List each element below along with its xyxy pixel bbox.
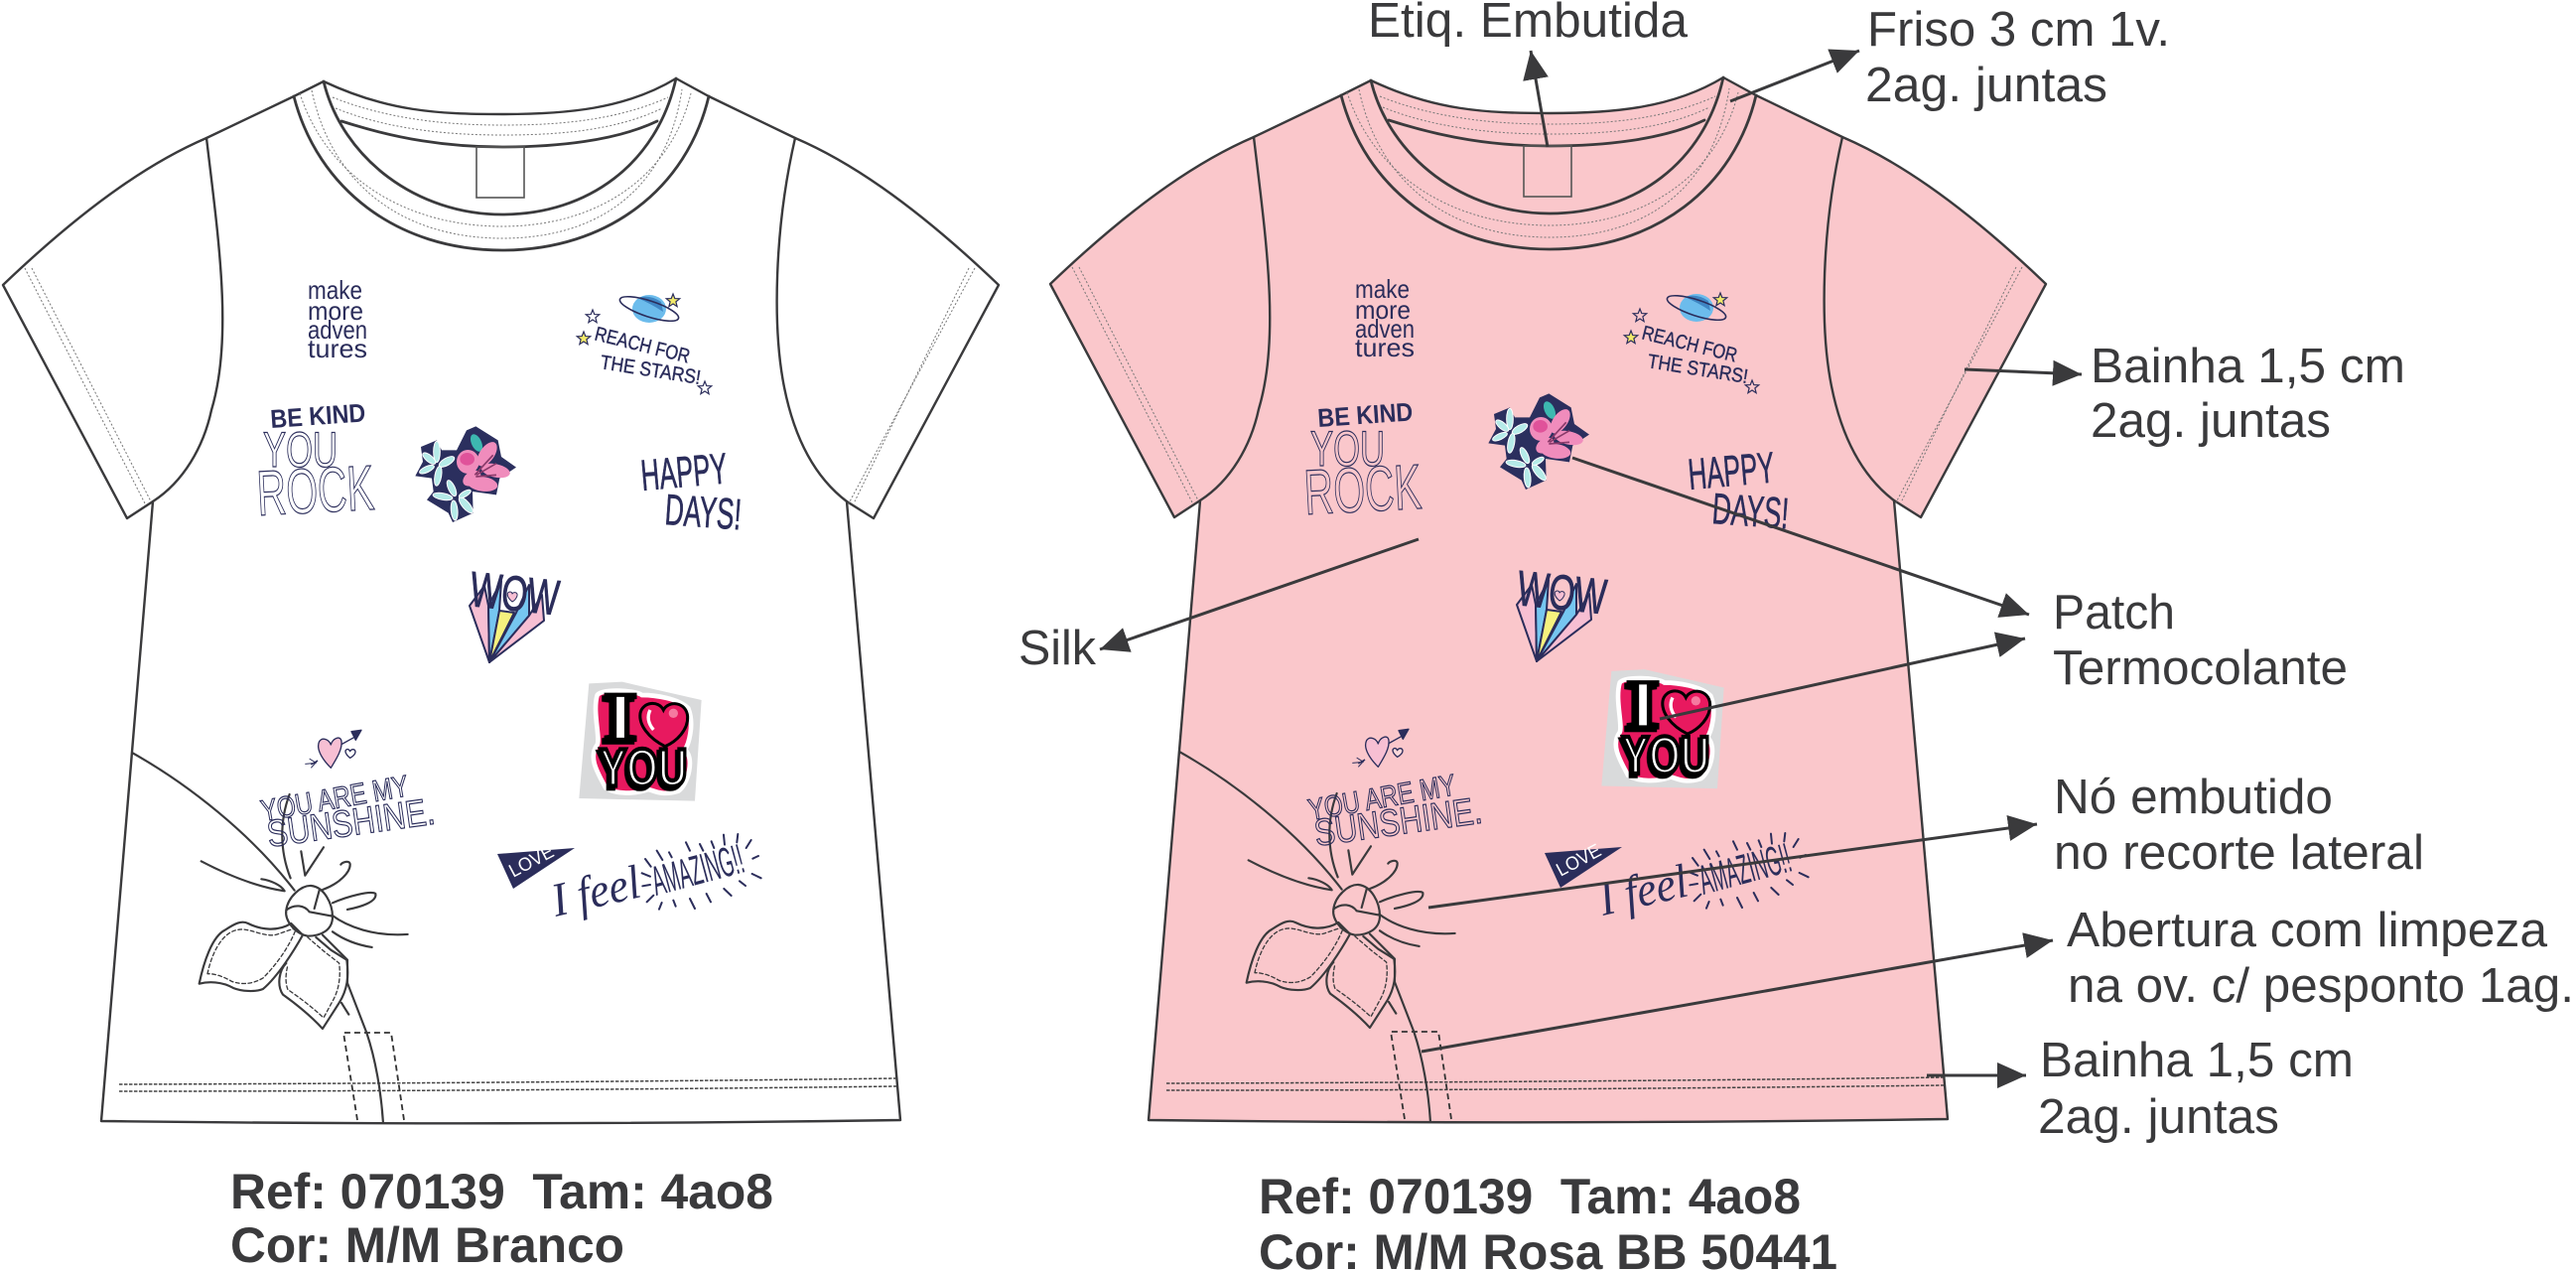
sleeve hem stitching <box>25 268 975 503</box>
callout: friso: Friso 3 cm 1v. <box>1867 3 2170 57</box>
callout: bainha manga: Bainha 1,5 cm <box>2091 340 2405 393</box>
panel: white t-shirt <box>3 78 999 1123</box>
callout: no embutido: no recorte lateral <box>2054 826 2424 880</box>
print stars <box>1624 293 1759 393</box>
callout: patch termocolante <box>1572 458 2348 719</box>
neck label <box>476 147 524 198</box>
print: heart and arrow <box>1352 729 1409 767</box>
callout: bainha manga: 2ag. juntas <box>2091 394 2331 448</box>
print: make more adventures: adven <box>1355 314 1415 344</box>
patch: flowers <box>415 426 516 522</box>
print: happy: HAPPY <box>1687 444 1777 499</box>
print: happy: HAPPY <box>639 445 730 500</box>
print: love pennant <box>1545 840 1622 888</box>
print: love pennant <box>497 841 575 889</box>
side opening dashes <box>1391 1032 1451 1119</box>
callout: abertura: Abertura com limpeza <box>2067 904 2548 957</box>
callout: bainha barra: Bainha 1,5 cm <box>2040 1034 2354 1087</box>
print: you are my: YOU ARE MY <box>1305 769 1458 827</box>
print: the stars: THE STARS! <box>1646 351 1749 388</box>
caption: pink shirt <box>1259 1169 1837 1272</box>
collar with stitching <box>1341 77 1756 249</box>
print: make more adventures: more <box>1355 295 1411 325</box>
callout: bainha manga <box>1965 340 2405 448</box>
print: reach for: REACH FOR <box>593 324 692 368</box>
callout: etiq. embutida <box>1368 0 1689 147</box>
print: wow diamond <box>468 561 563 662</box>
icon: planet <box>1665 291 1728 325</box>
print: sunshine: SUNSHINE. <box>264 791 438 856</box>
panel: white t-shirt: AMAZING!! <box>646 835 748 905</box>
print: make more adventures: tures <box>1355 333 1415 362</box>
shirt silhouette pink <box>1050 77 2046 1122</box>
callout: patch termocolante: Termocolante <box>2053 641 2348 695</box>
print: rock: ROCK <box>1302 451 1424 528</box>
print: wow diamond: WOW <box>468 561 563 626</box>
icon: planet <box>617 292 681 326</box>
print: be kind: BE KIND <box>269 397 366 434</box>
caption: white shirt: Ref: 070139 Tam: 4ao8 <box>230 1164 773 1219</box>
armhole seams <box>1200 137 1894 500</box>
print: make more adventures: adven <box>308 315 367 345</box>
print: love pennant: LOVE <box>1553 840 1605 881</box>
collar with stitching <box>294 78 709 250</box>
print: wow diamond: WOW <box>1515 560 1610 625</box>
callout: friso <box>1730 3 2170 112</box>
callout: no embutido <box>1428 771 2424 908</box>
print: make more adventures: more <box>308 296 363 326</box>
caption: white shirt: Cor: M/M Branco <box>230 1217 624 1272</box>
print: the stars: THE STARS! <box>599 352 702 389</box>
print: reach for: REACH FOR <box>1640 323 1739 367</box>
callout: abertura <box>1422 904 2574 1052</box>
patch: I love you: YOU <box>600 740 687 798</box>
print: you are my: YOU ARE MY <box>258 770 411 828</box>
patch: I love you <box>579 679 702 801</box>
side opening dashes <box>343 1033 404 1120</box>
patch: I love you: I <box>1626 666 1660 742</box>
bottom hem stitching <box>1166 1077 1944 1090</box>
print: amazing rays <box>1690 833 1809 909</box>
caption: white shirt <box>230 1164 773 1272</box>
print: wow diamond <box>1515 560 1610 661</box>
callout: patch termocolante: Patch <box>2053 586 2175 639</box>
callout: abertura: na ov. c/ pesponto 1ag. <box>2068 959 2574 1013</box>
patch: I love you: I <box>604 679 637 755</box>
panel: pink t-shirt <box>1050 77 2046 1122</box>
patch: I love you: YOU <box>1622 727 1709 785</box>
print: I feel: I feel <box>1593 855 1693 926</box>
print: heart and arrow <box>305 730 361 768</box>
print: love pennant: LOVE <box>505 841 558 882</box>
print: make more adventures: make <box>308 275 362 305</box>
print: you: YOU <box>1310 421 1385 477</box>
print: sunshine: SUNSHINE. <box>1311 790 1485 855</box>
print: rock: ROCK <box>255 452 376 529</box>
print: make more adventures: tures <box>308 334 367 363</box>
armhole seams <box>153 138 847 501</box>
print: days: DAYS! <box>663 486 744 539</box>
sleeve hem stitching <box>1072 267 2022 502</box>
neck label <box>1524 146 1571 197</box>
print: you: YOU <box>263 422 338 478</box>
print: make more adventures: make <box>1355 274 1410 304</box>
knot and side seam <box>1179 752 1455 1122</box>
callout: friso: 2ag. juntas <box>1865 59 2107 112</box>
caption: pink shirt: Ref: 070139 Tam: 4ao8 <box>1259 1169 1801 1224</box>
callout: no embutido: Nó embutido <box>2054 771 2333 824</box>
print: days: DAYS! <box>1710 485 1791 538</box>
print: amazing rays <box>642 834 761 910</box>
print: be kind: BE KIND <box>1316 396 1414 433</box>
callout: silk: Silk <box>1018 622 1096 675</box>
patch: I love you <box>1601 666 1724 788</box>
knot and side seam <box>132 753 408 1123</box>
panel: pink t-shirt: AMAZING!! <box>1694 834 1796 904</box>
callout: bainha barra: 2ag. juntas <box>2038 1090 2279 1144</box>
print: I feel: I feel <box>546 856 645 927</box>
callout: bainha barra <box>1927 1034 2354 1144</box>
bottom hem stitching <box>119 1078 896 1091</box>
patch: flowers <box>1488 393 1589 490</box>
callout: silk <box>1018 539 1419 675</box>
shirt silhouette white <box>3 78 999 1123</box>
print stars <box>577 294 712 394</box>
